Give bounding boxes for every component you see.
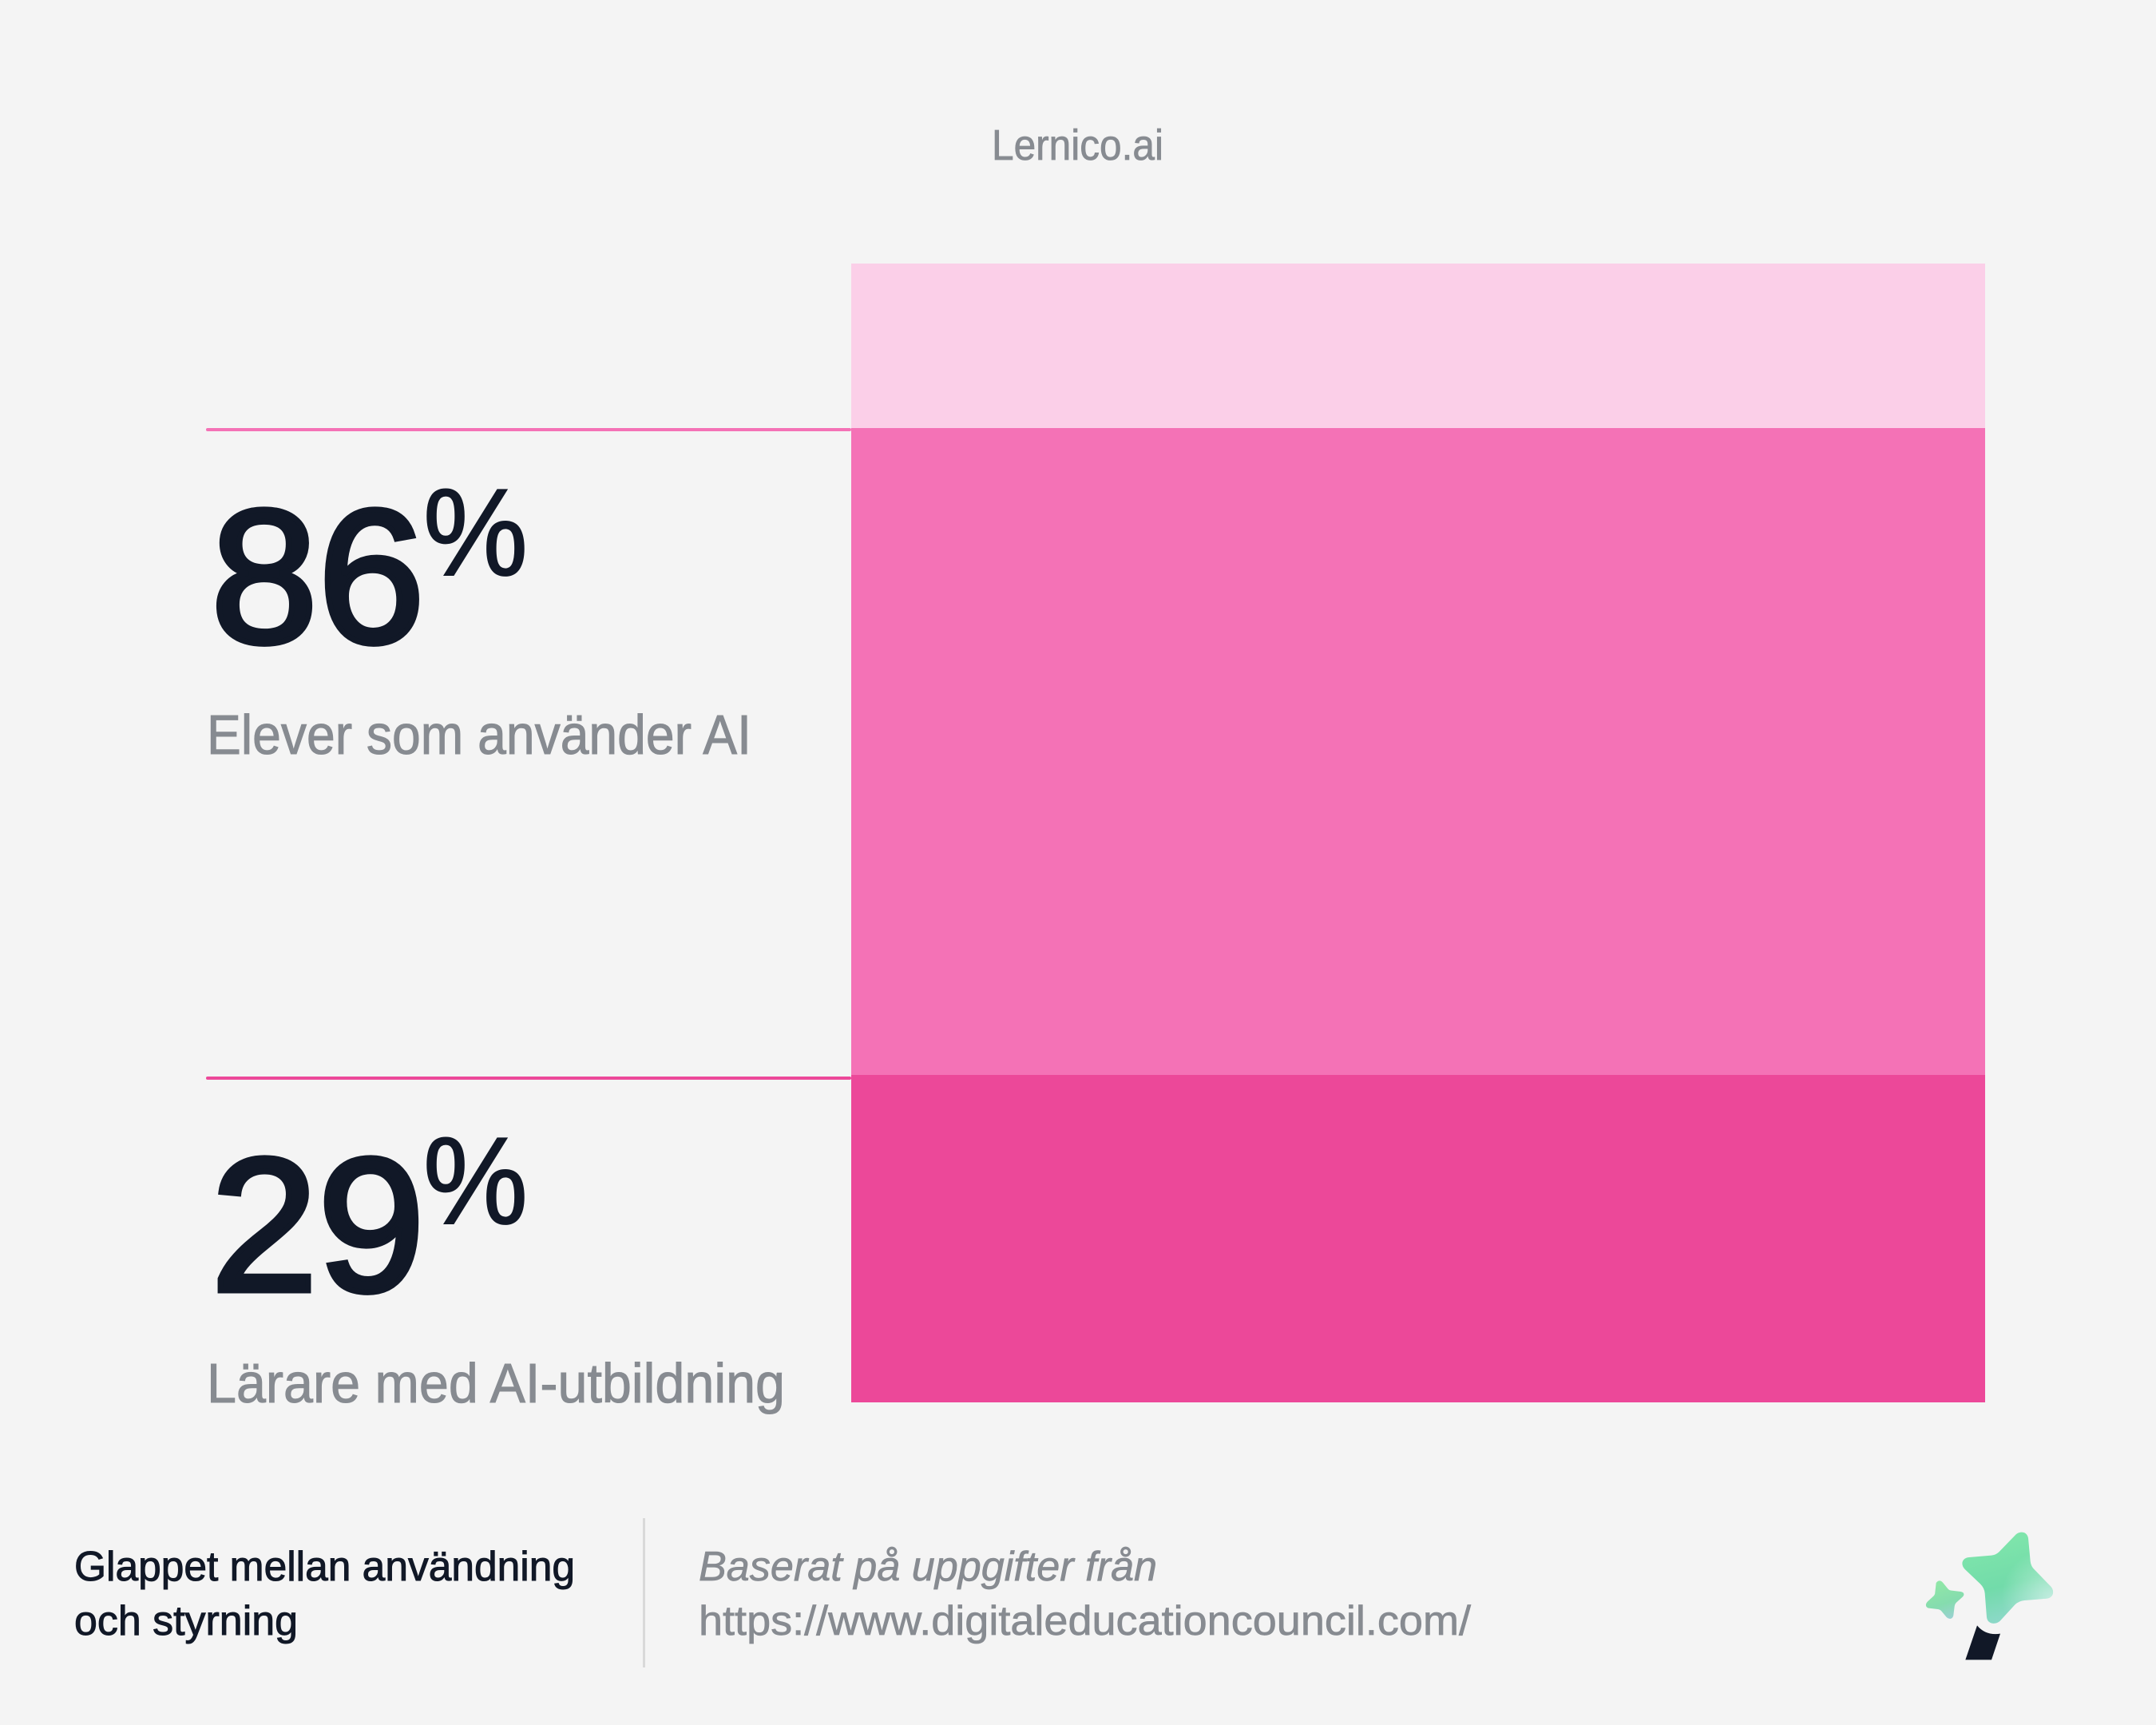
value 29: 29 [211,1120,425,1331]
stacked bar chart [851,264,1985,1402]
source note: https://www.digitaleducationcouncil.com/ [699,1598,1472,1644]
footer divider [643,1518,645,1668]
stat: 86% students using AI [206,428,851,766]
bar segment: remainder [851,264,1985,428]
bar segment: 86% students [851,428,1985,1075]
icon: large star [1962,1533,2053,1624]
header: brand name: Lernico.ai [992,121,1163,169]
source note [699,1544,1472,1644]
footer title [74,1544,575,1644]
footer title: Glappet mellan användning [74,1544,575,1590]
label: Elever som använder AI [207,704,751,766]
value 86: 86 [211,471,425,683]
bar segment: 29% teachers [851,1075,1985,1402]
source note: Baserat på uppgifter från [699,1544,1157,1590]
footer title: och styrning [74,1598,298,1644]
leader line 86% [206,428,851,431]
percent sign: % [423,463,528,601]
stat: 29% teachers with AI training [206,1077,851,1414]
percent sign: % [423,1112,528,1250]
label: Lärare med AI-utbildning [207,1352,785,1414]
icon: wand handle [1965,1625,2000,1660]
leader line 29% [206,1077,851,1080]
icon: small star [1926,1580,1964,1619]
icon: logo with stars and wand [1926,1533,2053,1660]
